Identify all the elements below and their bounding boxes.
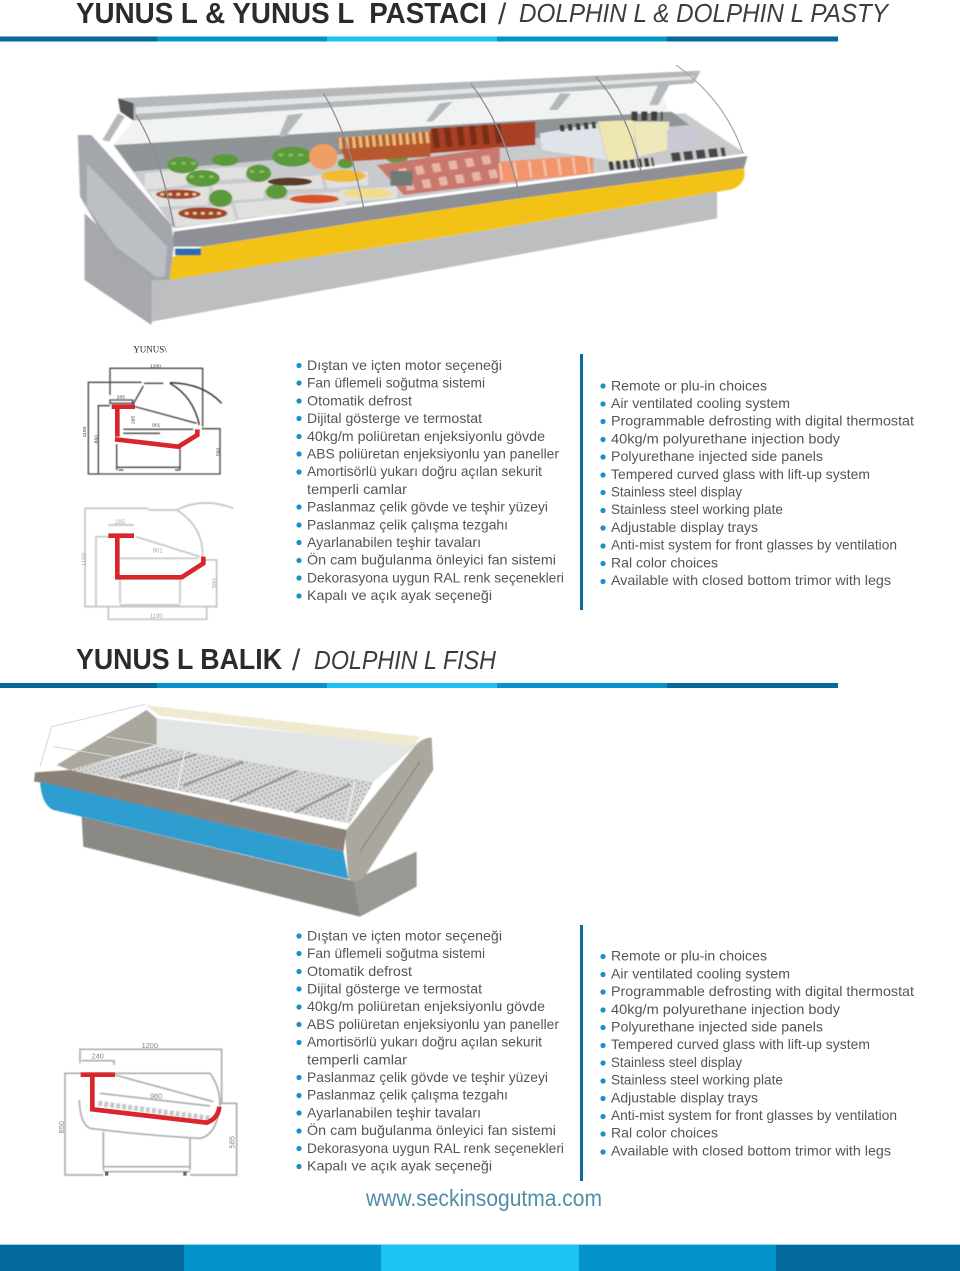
drawing: fish case section: 585 bbox=[228, 1136, 237, 1148]
drawing: section with dimensions: 1200 bbox=[150, 363, 161, 369]
list: Turkish features, section 1: Kapalı ve açık ayak seçeneği bbox=[307, 588, 492, 603]
heading bar: fish section bbox=[0, 683, 838, 688]
list: Turkish features, section 1: temperli camlar bbox=[307, 482, 407, 497]
list: English features, fish section: Stainless steel display bbox=[611, 1055, 742, 1070]
drawing: fish case section: 850 bbox=[57, 1121, 66, 1133]
trays bbox=[145, 167, 397, 227]
list: English features, fish section bbox=[600, 949, 914, 1158]
list: Turkish features, fish section: 40kg/m poliüretan enjeksiyonlu gövde bbox=[307, 999, 545, 1014]
drawing: section with dimensions: 285 bbox=[115, 520, 126, 526]
list: Turkish features, fish section: Fan üflemeli soğutma sistemi bbox=[307, 946, 485, 961]
list: Turkish features, section 1: Fan üflemeli soğutma sistemi bbox=[307, 376, 485, 391]
heading bar: top section bbox=[0, 36, 838, 42]
list: Turkish features, fish section: Dekorasyona uygun RAL renk seçenekleri bbox=[307, 1141, 564, 1156]
list: English features, fish section: Stainless steel working plate bbox=[611, 1073, 783, 1088]
list: Turkish features, section 1: Otomatik defrost bbox=[307, 393, 412, 408]
list: Turkish features, section 1: Paslanmaz çelik çalışma tezgahı bbox=[307, 517, 508, 532]
drawing: section with dimensions: 590 bbox=[213, 578, 219, 588]
list: English features, fish section: Adjustable display trays bbox=[611, 1090, 758, 1105]
drawing: fish case section: 980 bbox=[150, 1092, 162, 1101]
column divider: fish section bbox=[580, 925, 583, 1181]
title: Yunus L Balik bbox=[76, 644, 496, 677]
list: English features, section 1 bbox=[600, 378, 914, 588]
list: English features, fish section: Air ventilated cooling system bbox=[611, 966, 790, 981]
drawing: section with dimensions: 1190 bbox=[82, 426, 88, 437]
list: Turkish features, section 1: Dijital gösterge ve termostat bbox=[307, 411, 482, 426]
list: Turkish features, section 1: ABS poliüretan enjeksiyonlu yan paneller bbox=[307, 446, 559, 462]
list: Turkish features, fish section: Paslanmaz çelik gövde ve teşhir yüzeyi bbox=[307, 1070, 548, 1085]
list: English features, section 1: Polyurethane injected side panels bbox=[611, 449, 823, 464]
list: English features, section 1: Adjustable display trays bbox=[611, 520, 758, 535]
list: English features, section 1: Air ventilated cooling system bbox=[611, 396, 790, 411]
drawing: section with dimensions bbox=[82, 345, 233, 620]
list: English features, fish section: Programmable defrosting with digital thermostat bbox=[611, 984, 914, 999]
website url: www.seckinsogutma.com bbox=[365, 1185, 602, 1211]
drawing: section with dimensions: 860 bbox=[93, 435, 99, 443]
list: Turkish features, fish section: Ayarlanabilen teşhir tavaları bbox=[307, 1105, 481, 1120]
list: English features, section 1: 40kg/m polyurethane injection body bbox=[611, 431, 840, 446]
drawing: section with dimensions: YUNUS\ bbox=[133, 345, 167, 355]
list: English features, section 1: Stainless steel display bbox=[611, 484, 742, 500]
list: English features, section 1: Ral color choices bbox=[611, 555, 718, 570]
list: Turkish features, section 1: Paslanmaz çelik gövde ve teşhir yüzeyi bbox=[307, 500, 548, 515]
title: Yunus L Balik: DOLPHIN L FISH bbox=[314, 645, 496, 675]
list: Turkish features, fish section: Dijital gösterge ve termostat bbox=[307, 982, 482, 996]
title: Yunus L Balik: YUNUS L BALIK bbox=[76, 644, 282, 676]
list: Turkish features, fish section: Ön cam buğulanma önleyici fan sistemi bbox=[307, 1123, 556, 1138]
list: Turkish features, fish section: Paslanmaz çelik çalışma tezgahı bbox=[307, 1088, 508, 1103]
list: Turkish features, section 1: Ayarlanabilen teşhir tavaları bbox=[307, 535, 481, 550]
list: English features, fish section: 40kg/m polyurethane injection body bbox=[611, 1002, 840, 1017]
list: Turkish features, fish section: Kapalı ve açık ayak seçeneği bbox=[307, 1158, 492, 1174]
list: English features, fish section: Tempered curved glass with lift-up system bbox=[611, 1037, 870, 1052]
title: Yunus L Balik: / bbox=[292, 644, 301, 677]
list: English features, fish section: Polyurethane injected side panels bbox=[611, 1020, 823, 1034]
list: Turkish features, section 1: Amortisörlü yukarı doğru açılan sekurit bbox=[307, 464, 542, 479]
list: Turkish features, fish section bbox=[296, 928, 564, 1174]
list: English features, section 1: Remote or plu-in choices bbox=[611, 378, 767, 393]
list: English features, section 1: Stainless steel working plate bbox=[611, 502, 783, 517]
list: Turkish features, fish section: Dıştan ve içten motor seçeneği bbox=[307, 928, 502, 943]
drawing: fish case section: 1200 bbox=[142, 1041, 158, 1050]
list: Turkish features, section 1: 40kg/m poliüretan enjeksiyonlu gövde bbox=[307, 429, 545, 444]
list: English features, section 1: Programmable defrosting with digital thermostat bbox=[611, 414, 914, 429]
list: Turkish features, section 1: Dekorasyona uygun RAL renk seçenekleri bbox=[307, 570, 564, 585]
list: Turkish features, fish section: Amortisörlü yukarı doğru açılan sekurit bbox=[307, 1035, 542, 1050]
drawing: section with dimensions: 901 bbox=[152, 423, 161, 429]
list: English features, fish section: Ral color choices bbox=[611, 1126, 718, 1141]
list: English features, section 1: Available with closed bottom trimor with legs bbox=[611, 573, 891, 588]
drawing: fish case section bbox=[57, 1041, 237, 1176]
drawing: fish case section: 240 bbox=[92, 1052, 104, 1061]
drawing: section with dimensions: 285 bbox=[117, 395, 125, 401]
photo: Yunus L Balik display case bbox=[34, 704, 433, 917]
list: Turkish features, section 1 bbox=[296, 358, 564, 603]
footer colour band bbox=[0, 1244, 960, 1271]
list: Turkish features, fish section: temperli camlar bbox=[307, 1052, 407, 1067]
list: English features, section 1: Tempered curved glass with lift-up system bbox=[611, 467, 870, 482]
drawing: section with dimensions: 1190 bbox=[82, 552, 88, 566]
list: Turkish features, fish section: ABS poliüretan enjeksiyonlu yan paneller bbox=[307, 1017, 559, 1032]
drawing: section with dimensions: 1190 bbox=[150, 614, 164, 620]
list: English features, fish section: Available with closed bottom trimor with legs bbox=[611, 1143, 891, 1158]
list: English features, fish section: Remote or plu-in choices bbox=[611, 949, 767, 964]
list: English features, section 1: Anti-mist system for front glasses by ventilation bbox=[611, 538, 897, 553]
list: Turkish features, fish section: Otomatik defrost bbox=[307, 964, 412, 979]
drawing: section with dimensions: 590 bbox=[215, 447, 221, 456]
drawing: section with dimensions: 285 bbox=[131, 415, 137, 424]
title: Yunus L and Pastaci bbox=[76, 0, 890, 31]
list: Turkish features, section 1: Dıştan ve içten motor seçeneği bbox=[307, 358, 502, 373]
column divider: section 1 bbox=[580, 354, 583, 610]
photo: Yunus L display case bbox=[78, 65, 747, 325]
list: Turkish features, section 1: Ön cam buğulanma önleyici fan sistemi bbox=[307, 553, 556, 568]
list: English features, fish section: Anti-mist system for front glasses by ventilation bbox=[611, 1108, 897, 1123]
drawing: section with dimensions: 901 bbox=[153, 549, 163, 555]
